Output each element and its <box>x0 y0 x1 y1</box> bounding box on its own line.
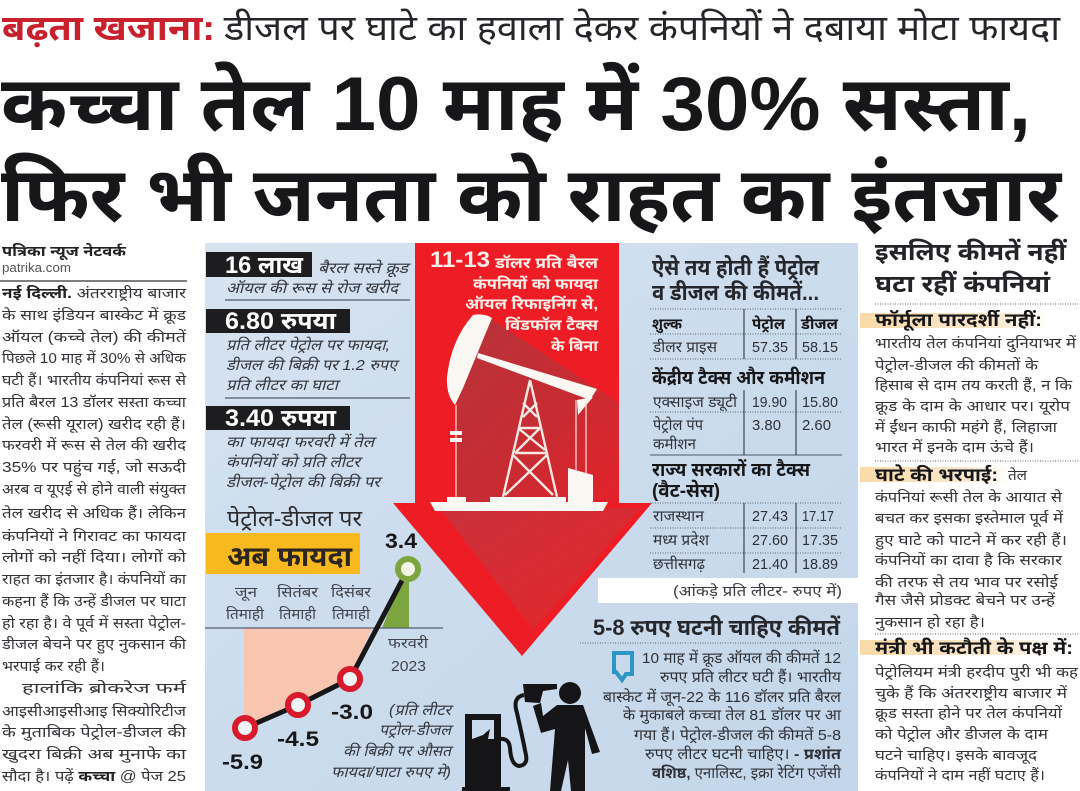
reason: recovering losses: तेल <box>1008 466 1028 484</box>
quarter labels: फरवरी <box>388 635 428 652</box>
story text: कंपनियों ने गिरावट का फायदा <box>2 527 186 545</box>
row: madhya pradesh: 27.60 <box>752 532 788 549</box>
red arrow with oil pump <box>393 243 652 656</box>
icon: person filling fuel <box>462 682 600 791</box>
analyst quote: गया हैं। पेट्रोल-डीजल की कीमतें 5-8 <box>634 726 841 744</box>
row: pump commission: 3.80 <box>752 417 781 434</box>
story text: राहत का इंतजार है। कंपनियों का <box>2 571 186 588</box>
byline <box>0 242 187 281</box>
fact: 16 lakh: 16 लाख <box>225 252 304 279</box>
table title: व डीजल की कीमतें... <box>652 280 819 305</box>
loss area <box>244 628 372 728</box>
reason: formula: भारतीय तेल कंपनियां दुनियाभर में <box>875 334 1076 353</box>
reason: recovering losses: नुकसान हो रहा है। <box>875 614 985 632</box>
story text: फरवरी में रूस से तेल की खरीद <box>2 436 186 454</box>
reason: recovering losses: कंपनियां रूसी तेल के आयात से <box>875 488 1062 506</box>
right column: reasons <box>860 238 1080 784</box>
row: excise duty <box>653 394 838 412</box>
reason: minister <box>860 637 1078 784</box>
story text: कहना हैं कि उन्हें डीजल पर घाटा <box>2 593 186 610</box>
row: rajasthan: 17.17 <box>802 508 834 525</box>
story text: भरपाई कर रही हैं। <box>2 658 105 675</box>
section: state tax: राज्य सरकारों का टैक्स <box>652 458 811 481</box>
story text: सौदा है। पढ़ें कच्चा @ पेज 25 <box>2 767 186 785</box>
story text: पिछले 10 माह में 30% से अधिक <box>2 349 187 367</box>
arrow caption: 11-13 <box>430 247 490 272</box>
chart heading: पेट्रोल-डीजल पर <box>227 505 363 531</box>
fact: 6.80 rupees: प्रति लीटर पेट्रोल पर फायदा, <box>226 336 390 354</box>
profit area <box>382 582 409 628</box>
story text: 35% पर पहुंच गई, जो सऊदी <box>2 459 186 477</box>
fact: 16 lakh: ऑयल की रूस से रोज खरीद <box>226 279 401 297</box>
table header row <box>652 315 839 334</box>
arrow caption: के बिना <box>551 337 599 355</box>
story text: आइसीआइसीआइ सिक्योरिटीज <box>2 703 186 720</box>
row: pump commission <box>653 416 831 453</box>
table lines <box>650 309 842 573</box>
reason: recovering losses: कंपनियों का दावा है कि सरकार <box>875 552 1063 569</box>
table title: ऐसे तय होती हैं पेट्रोल <box>652 255 820 281</box>
fact: 6.80 rupees: 6.80 रुपया <box>225 308 337 335</box>
right column heading: घटा रहीं कंपनियां <box>875 270 1051 298</box>
analyst quote: वशिष्ठ, एनालिस्ट, इक्रा रेटिंग एजेंसी <box>652 764 842 782</box>
left column: news story <box>0 242 188 785</box>
row: chhattisgarh: 21.40 <box>752 556 788 573</box>
fact: 3.40 rupees: 3.40 रुपया <box>225 405 337 432</box>
row: dealer price: 57.35 <box>752 339 788 356</box>
person <box>559 682 581 704</box>
story text: प्रति बैरल 13 डॉलर सस्ता कच्चा <box>2 394 186 411</box>
price table <box>650 255 842 600</box>
quarter labels: जून <box>235 585 258 602</box>
analyst quote: के मुकाबले कच्चा तेल 81 डॉलर पर आ <box>623 706 842 725</box>
story text: घटी हैं। भारतीय कंपनियां रूस से <box>2 371 186 389</box>
reason: recovering losses: गैस जैसे प्रोडक्ट बेचने पर उन्हें <box>875 591 1055 609</box>
chart note: (प्रति लीटर <box>389 701 454 719</box>
row: rajasthan: 27.43 <box>752 508 788 525</box>
row: madhya pradesh <box>653 531 838 549</box>
quarter labels: सितंबर <box>277 584 319 601</box>
quarter labels <box>226 584 428 675</box>
byline: पत्रिका न्यूज नेटवर्क <box>2 242 126 261</box>
analyst quote: 10 माह में क्रूड ऑयल की कीमतें 12 <box>642 649 841 668</box>
nozzle <box>523 684 557 703</box>
icon: speech bubble <box>614 653 632 680</box>
fact: 6.80 rupees: प्रति लीटर का घाटा <box>226 376 341 394</box>
row: dealer price: 58.15 <box>802 339 838 356</box>
fuel pump <box>462 714 510 791</box>
chart note <box>331 701 455 781</box>
byline: patrika.com <box>2 260 71 275</box>
chart note: की बिक्री पर औसत <box>343 742 455 760</box>
arrow shading <box>457 319 619 503</box>
story text: डीजल बेचने पर हुए नुकसान की <box>1 635 186 654</box>
story text: के साथ इंडियन बास्केट में क्रूड <box>2 306 186 325</box>
reason: formula: फॉर्मूला पारदर्शी नहीं: <box>875 309 1042 332</box>
hose <box>500 695 526 766</box>
story text: हो रहा है। वे पूर्व में सस्ता पेट्रोल- <box>2 614 186 633</box>
table header row: शुल्क <box>652 316 683 334</box>
main headline: फिर भी जनता को राहत का इंतजार <box>1 153 1063 238</box>
top strapline: बढ़ता खजाना: <box>2 9 215 48</box>
fact: 3.40 rupees: कंपनियों को प्रति लीटर <box>226 453 363 471</box>
chart heading <box>206 505 363 574</box>
row: pump commission: पेट्रोल पंप <box>653 416 703 434</box>
fact: 16 lakh <box>206 252 411 297</box>
row: madhya pradesh: मध्य प्रदेश <box>653 531 710 549</box>
analyst box <box>580 615 842 782</box>
reason: minister: घटने चाहिए। इसके बावजूद <box>875 746 1037 765</box>
row: excise duty: 19.90 <box>752 394 787 411</box>
story text: तेल (रूसी यूराल) खरीद रही हैं। <box>2 415 186 434</box>
reason: formula: पेट्रोल-डीजल की कीमतों के <box>875 356 1039 374</box>
story text: ऑयल (कच्चे तेल) की कीमतें <box>2 328 187 346</box>
row: pump commission: 2.60 <box>802 417 831 434</box>
chart heading: अब फायदा <box>227 541 353 572</box>
quarter labels: तिमाही <box>279 606 316 623</box>
table header row: डीजल <box>800 316 839 333</box>
row: chhattisgarh: छत्तीसगढ़ <box>653 556 706 573</box>
row: rajasthan <box>653 508 834 525</box>
right column heading <box>875 238 1068 298</box>
reason: recovering losses: की तरफ से तय भाव पर रसोई <box>875 573 1059 591</box>
row: madhya pradesh: 17.35 <box>802 532 838 549</box>
reason: recovering losses: बचत कर इसका इस्तेमाल पूर्व में <box>875 509 1063 528</box>
arrow caption: कंपनियों को फायदा <box>473 275 599 293</box>
story text: के मुताबिक पेट्रोल-डीजल की <box>2 723 186 742</box>
row: dealer price <box>652 339 838 356</box>
fact stack <box>206 252 411 491</box>
arrow caption: विंडफॉल टैक्स <box>505 316 599 334</box>
story text: तेल खरीद से अधिक हैं। लेकिन <box>2 504 187 522</box>
fact: 3.40 rupees: डीजल-पेट्रोल की बिक्री पर <box>226 473 383 491</box>
line chart: profit and loss <box>205 505 455 781</box>
data line <box>245 569 408 728</box>
main headline <box>1 61 1063 238</box>
reason: formula: क्रूड के दाम के आधार पर। यूरोप <box>875 397 1071 416</box>
quarter labels: दिसंबर <box>331 584 372 601</box>
arrow head shading <box>440 508 640 630</box>
data values <box>222 530 417 774</box>
reason: formula: भारत में इनके दाम ऊंचे हैं। <box>875 438 1034 456</box>
table footnote: (आंकड़े प्रति लीटर- रुपए में) <box>673 582 842 600</box>
data points <box>235 559 418 738</box>
data values: -3.0 <box>331 701 373 724</box>
story text <box>1 285 188 785</box>
reason: minister: कंपनियों ने दाम नहीं घटाए हैं। <box>875 766 1045 784</box>
chart note: पट्रोल-डीजल <box>379 721 454 739</box>
icon: oil pump jack <box>430 314 608 511</box>
reason: formula: में ईंधन काफी महंगे हैं, लिहाजा <box>875 418 1057 436</box>
arrow shape <box>393 243 652 656</box>
analyst quote: बास्केट में जून-22 के 116 डॉलर प्रति बैरल <box>603 688 842 707</box>
reason: formula: हिसाब से दाम तय करती हैं, न कि <box>875 376 1073 394</box>
reason: minister: क्रूड सस्ता होने पर तेल कंपनियों <box>875 704 1062 723</box>
reason: minister: चुके हैं कि अंतरराष्ट्रीय बाजार में <box>875 684 1067 703</box>
section: state tax: (वैट-सेस) <box>652 479 720 502</box>
reason: recovering losses: हुए घाटे को पाटने में कर रही हैं। <box>875 531 1067 550</box>
data values: -4.5 <box>277 728 319 751</box>
fact: 16 lakh: बैरल सस्ते क्रूड <box>318 259 411 278</box>
row: pump commission: कमीशन <box>653 436 697 453</box>
analyst quote: रुपए लीटर घटनी चाहिए। - प्रशांत <box>645 746 842 763</box>
reason: recovering losses: घाटे की भरपाई: <box>875 464 998 485</box>
reason: minister: को पेट्रोल और डीजल के दाम <box>875 725 1048 743</box>
row: rajasthan: राजस्थान <box>653 508 705 525</box>
table title <box>652 255 820 305</box>
quarter labels: तिमाही <box>226 606 264 623</box>
section: central tax: केंद्रीय टैक्स और कमीशन <box>652 366 825 389</box>
table header row: पेट्रोल <box>752 315 786 333</box>
fact: 3.40 rupees: का फायदा फरवरी में तेल <box>226 433 377 451</box>
reason: minister: मंत्री भी कटौती के पक्ष में: <box>875 637 1073 658</box>
fact: 6.80 rupees <box>206 308 400 394</box>
chart note: फायदा/घाटा रुपए मे) <box>331 763 451 781</box>
row: dealer price: डीलर प्राइस <box>652 339 718 356</box>
arrow caption: डॉलर प्रति बैरल <box>494 254 599 272</box>
arrow caption <box>430 247 599 355</box>
analyst quote: रुपए प्रति लीटर घटी हैं। भारतीय <box>660 668 841 686</box>
row: chhattisgarh: 18.89 <box>802 556 838 573</box>
top strapline: डीजल पर घाटे का हवाला देकर कंपनियों ने दबाया मोटा फायदा <box>223 8 1061 48</box>
reason: minister: पेट्रोलियम मंत्री हरदीप पुरी भी कह <box>875 663 1078 682</box>
data values: -5.9 <box>222 751 263 774</box>
quarter labels: तिमाही <box>332 606 370 623</box>
story text: लोगों को नहीं दिया। लोगों को <box>2 549 186 566</box>
story text: खुदरा बिक्री अब मुनाफे का <box>2 745 186 764</box>
row: chhattisgarh <box>653 556 838 573</box>
fact: 3.40 rupees <box>206 405 383 491</box>
section: state tax <box>652 458 811 502</box>
reason: formula <box>860 309 1076 456</box>
analyst heading: 5-8 रुपए घटनी चाहिए कीमतें <box>593 615 841 640</box>
row: excise duty: एक्साइज ड्यूटी <box>653 394 738 412</box>
panel: blue infographic background <box>205 243 858 791</box>
quarter labels: 2023 <box>391 659 426 675</box>
main headline: कच्चा तेल 10 माह में 30% सस्ता, <box>1 61 1031 147</box>
reason: recovering losses <box>860 464 1067 632</box>
data values: 3.4 <box>385 530 417 553</box>
story text: हालांकि ब्रोकरेज फर्म <box>22 679 188 697</box>
story text: अरब व यूएई से होने वाली संयुक्त <box>2 480 187 499</box>
story text: नई दिल्ली. अंतरराष्ट्रीय बाजार <box>2 285 187 302</box>
fact: 6.80 rupees: डीजल की बिक्री पर 1.2 रुपए <box>226 356 400 374</box>
row: excise duty: 15.80 <box>802 394 838 411</box>
right column heading: इसलिए कीमतें नहीं <box>875 238 1068 266</box>
arrow caption: ऑयल रिफाइनिंग से, <box>465 295 598 313</box>
analyst quote <box>603 649 842 782</box>
